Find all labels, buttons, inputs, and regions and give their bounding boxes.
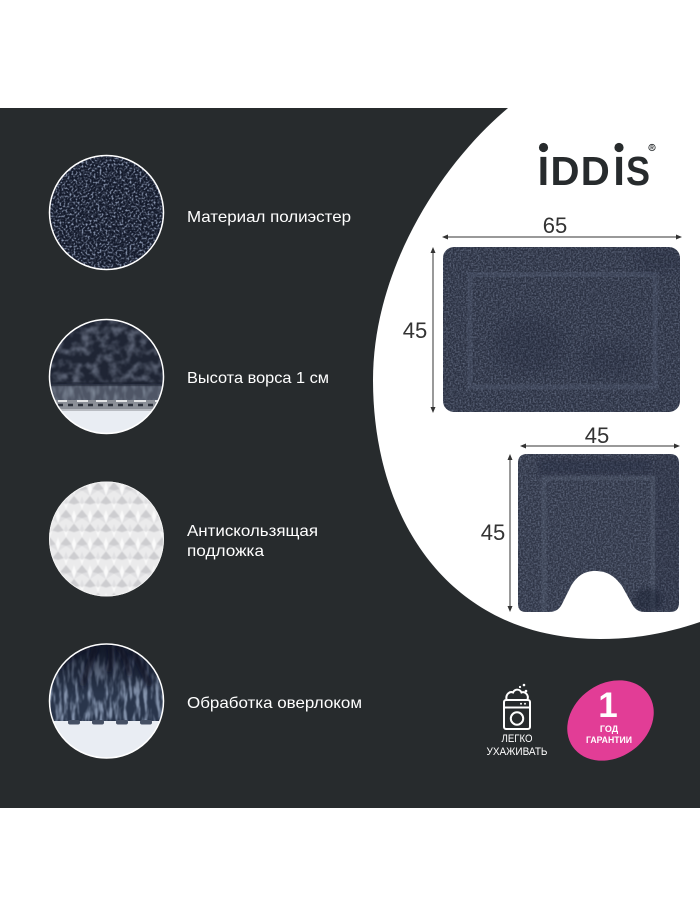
text: pile height: Высота ворса 1 см: [187, 370, 329, 387]
dimension: height 45: [403, 247, 436, 413]
badge: 1 year warranty: ГОД: [600, 724, 619, 734]
text: easy care: УХАЖИВАТЬ: [486, 746, 548, 758]
text: anti-slip backing: Антискользящая: [187, 523, 318, 540]
dimension: height 45: 45: [481, 520, 505, 545]
dimension: width 65: 65: [543, 213, 567, 238]
IDDIS logo: I: [538, 148, 549, 194]
white curved area: [373, 108, 700, 639]
dimension: width 45: 45: [585, 423, 609, 448]
text: overlock: Обработка оверлоком: [187, 695, 362, 712]
circle: pile height: [49, 319, 164, 435]
icon: washing machine with foam: [504, 684, 530, 729]
dark background panel: [0, 108, 700, 808]
IDDIS logo: S: [626, 148, 650, 194]
text: material: Материал полиэстер: [187, 209, 351, 226]
badge: 1 year warranty: [552, 664, 669, 777]
circle: polyester pile material: [49, 155, 164, 270]
rectangular bath mat: [443, 247, 685, 412]
dimension: height 45: 45: [403, 318, 427, 343]
text: easy care: [486, 733, 548, 758]
circle: anti-slip backing: [48, 481, 164, 597]
IDDIS logo: D: [550, 148, 580, 194]
IDDIS logo: D: [581, 148, 610, 194]
badge: 1 year warranty: 1: [598, 686, 618, 725]
dimension: height 45: [481, 454, 512, 612]
text: easy care: ЛЕГКО: [502, 733, 533, 745]
text: anti-slip backing: подложка: [187, 543, 264, 560]
badge: 1 year warranty: ГАРАНТИИ: [586, 735, 632, 745]
IDDIS logo: [538, 143, 655, 194]
IDDIS logo: I: [613, 148, 625, 194]
contour toilet mat: [518, 454, 679, 612]
circle: overlock edge: [49, 644, 164, 759]
IDDIS logo: R: [650, 146, 654, 152]
text: anti-slip backing: [187, 523, 318, 560]
dimension: width 45: [520, 423, 680, 448]
dimension: width 65: [442, 213, 682, 240]
